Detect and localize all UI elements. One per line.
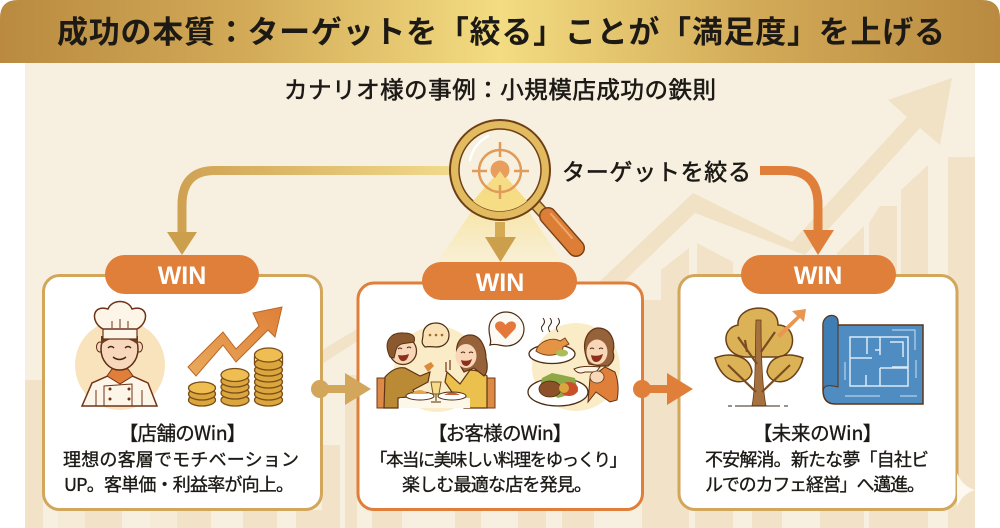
panel: customer win xyxy=(358,262,642,510)
icon: heart bubble xyxy=(489,312,524,346)
arrow: to customer win xyxy=(485,222,516,262)
panel: future win xyxy=(679,255,957,510)
card text: 【未来のWin】 xyxy=(762,417,873,446)
badge: WIN: WIN xyxy=(794,262,842,290)
card text xyxy=(370,417,627,497)
spotlight beam xyxy=(437,170,563,262)
illustration: woman with plates xyxy=(528,318,620,411)
card text xyxy=(705,417,929,497)
card text: UP。客単価・利益率が向上。 xyxy=(64,471,294,497)
header band xyxy=(0,0,1000,63)
title: 成功の本質：ターゲットを「絞る」ことが「満足度」を上げる xyxy=(57,7,945,52)
card text xyxy=(63,417,299,497)
sparkle xyxy=(957,473,975,507)
icon: speech bubble xyxy=(422,323,449,347)
icon: chef xyxy=(75,302,165,410)
icon: coin stacks xyxy=(188,348,282,406)
icon: magnifying glass xyxy=(450,120,576,248)
card text: 「本当に美味しい料理をゆっくり」 xyxy=(370,447,627,472)
card text: 【店舗のWin】 xyxy=(128,417,237,446)
badge: WIN: WIN xyxy=(158,262,206,290)
icon: rising chart arrow xyxy=(188,307,282,376)
icon: growth arrow xyxy=(777,309,806,338)
badge: WIN xyxy=(422,262,577,300)
arrow: customer to future xyxy=(633,373,693,405)
card text: ルでのカフェ経営」へ邁進。 xyxy=(705,471,925,497)
card text: 不安解消。新たな夢「自社ビ xyxy=(705,446,929,472)
badge: WIN: WIN xyxy=(476,269,524,297)
arrow: store to customer xyxy=(311,373,371,405)
arrow: to future win xyxy=(760,170,834,255)
panel: store win xyxy=(44,255,322,510)
badge: WIN xyxy=(105,255,259,294)
icon: blueprint xyxy=(823,316,923,404)
card text: 楽しむ最適な店を発見。 xyxy=(402,471,592,497)
card text: 【お客様のWin】 xyxy=(437,417,563,446)
card text: 理想の客層でモチベーション xyxy=(63,446,299,472)
arrow: to store win xyxy=(167,170,452,255)
subtitle: カナリオ様の事例：小規模店成功の鉄則 xyxy=(284,71,716,105)
illustration: couple dining xyxy=(377,326,495,412)
badge: WIN xyxy=(741,255,896,294)
icon: tree xyxy=(715,308,803,406)
label: target: ターゲットを絞る xyxy=(562,153,751,187)
